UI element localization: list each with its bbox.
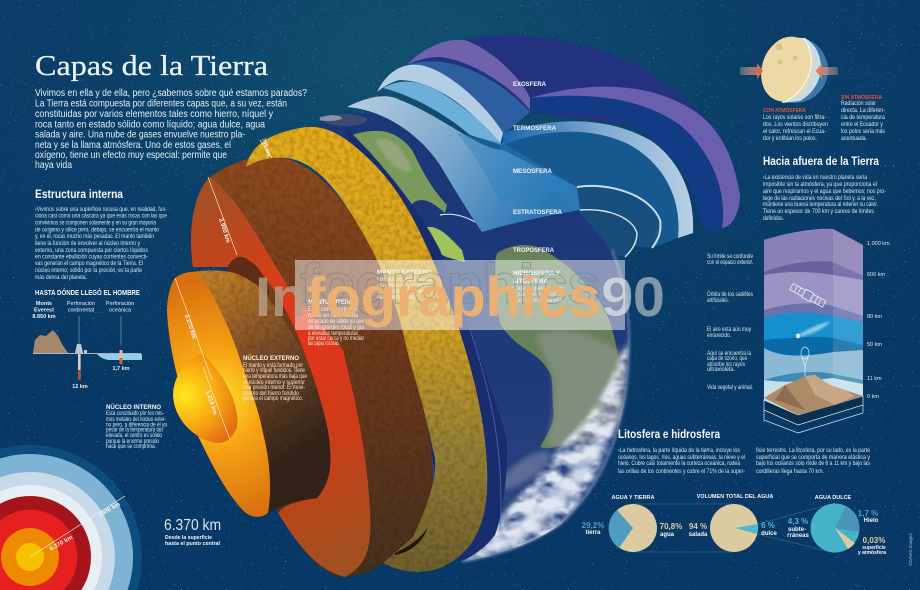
label: manto interno (308, 299, 365, 347)
dark cavity in yellow band (395, 525, 428, 555)
altitude labels: 80 km (867, 314, 882, 320)
labels: atmosphere column notes (707, 254, 754, 391)
mountain block (764, 375, 863, 433)
labels: atmosphere column notes: con el espacio exterior. (707, 260, 753, 266)
pie: agua y tierra (582, 495, 682, 552)
text: hacia afuera: tege de las radiaciones nocivas del Sol y, a la vez, (763, 196, 876, 202)
label: nucleo interno: hace que se comprima. (106, 444, 156, 450)
pie: agua y tierra: tierra (585, 530, 601, 536)
labels: atmosphere column notes: El aire está aún muy (707, 327, 751, 333)
heading: hacia afuera: Hacia afuera de la Tierra (763, 154, 879, 168)
intro text (35, 88, 307, 171)
altitude labels: 1.000 km (867, 241, 890, 247)
text: litosfera e hidrosfera: hielo. Cubre casi totalmente la corteza oceánica, rodea (618, 461, 741, 467)
pie: agua dulce: superficie (862, 545, 886, 551)
pie: agua dulce: subte- (788, 527, 806, 533)
arrow: left incoming (740, 63, 763, 79)
south america (494, 245, 625, 448)
text: hacia afuera: definidos. (763, 216, 784, 222)
cloud cover (462, 340, 628, 562)
chart: concentric earth section: 2900 km (98, 502, 122, 519)
chart: atmosphere column (764, 225, 890, 433)
termosfera shell (377, 65, 693, 248)
label: manto interno: MANTO INTERNO (308, 299, 358, 306)
distance lines and labels (175, 138, 272, 440)
labels: atmosphere column notes: Vida vegetal y animal. (707, 385, 753, 391)
label: nucleo interno: elevada, el centro es sólido (106, 433, 163, 439)
labels: atmosphere layer names: ESTRATOSFERA (513, 209, 562, 216)
text: estructura interna: tiene la función de envolver al núcleo interno y (35, 241, 140, 247)
depth labels: Everest (34, 308, 54, 314)
inner core sphere (173, 354, 237, 443)
intro text: salada y aire. Una nube de gases envuelve nuestro pla- (35, 130, 245, 140)
labels: atmosphere column notes: capa de ozono, que (707, 356, 747, 362)
text: litosfera e hidrosfera: las orillas de los continentes y cubre el 71% de la super- (618, 469, 745, 475)
label: manto externo: que se desplazan muy (377, 289, 427, 295)
text: hacia afuera: imposible sin la atmósfera, ya que proporciona el (763, 182, 877, 188)
pie: agua dulce: rráneas (787, 533, 810, 539)
icon: mountain (33, 330, 68, 353)
text: con atmosfera: dor y entibian los polos. (763, 136, 817, 142)
chart: concentric earth section (0, 445, 142, 590)
label: manto interno: rocas en fase sólida (308, 313, 359, 319)
mantle red face (191, 177, 370, 577)
atmosphere translucent sheet (347, 96, 580, 232)
icon: balloon (801, 347, 809, 382)
pie: agua dulce: 1,7 % (858, 509, 878, 518)
text: con atmosfera: dos. Los vientos distribuyen (763, 122, 828, 128)
label: manto externo: MANTO EXTERNO (377, 269, 432, 276)
distance lines and labels: 1.216 km (204, 390, 218, 416)
text: litosfera e hidrosfera (618, 448, 871, 475)
pie: volumen total del agua: salada (689, 532, 708, 538)
labels: atmosphere layer names: EXOSFERA (513, 81, 546, 88)
pie: agua y tierra: 70,8% (660, 522, 682, 531)
label: manto interno: de las grandes rocas y gra (308, 325, 365, 331)
text: sin atmosfera: acentuada. (841, 136, 867, 142)
text: hidrosfera y litosfera (513, 286, 564, 304)
connector lines (633, 503, 835, 553)
labels: atmosphere column notes: Su límite se confunde (707, 254, 754, 260)
central america (427, 214, 475, 262)
north america (314, 114, 447, 213)
labels: atmosphere layer names: TERMOSFERA (513, 125, 556, 132)
text: sin atmosfera: SIN ATMÓSFERA (841, 93, 882, 101)
pie: volumen total del agua: VOLUMEN TOTAL DEL AGUA (697, 494, 773, 500)
charts: water pies (582, 494, 886, 556)
text: litosfera e hidrosfera: ‹La hidrosfera, la parte líquida de la tierra, incluye los (618, 448, 740, 454)
depth labels: Perforación (106, 301, 134, 307)
label: manto interno: en estado de sólido ya que (308, 319, 365, 325)
label: manto externo: Formado por rocas sólidas (377, 277, 432, 283)
depth labels: Perforación (67, 301, 95, 307)
text: estructura interna (35, 207, 168, 281)
exosfera shell (405, 36, 740, 232)
label: manto interno: a elevadas temperaturas (308, 331, 358, 337)
text: con atmosfera: CON ATMÓSFERA (763, 106, 806, 114)
mantle cavity lip (228, 257, 270, 296)
intro text: roca tanto en estado sólido como líquido; agua dulce, agua (35, 120, 265, 130)
text: litosfera e hidrosfera: ficie terrestre. La litosfera, por su lado, es la parte (756, 448, 871, 454)
text: sin atmosfera: directa. La diferen- (841, 108, 885, 114)
label: nucleo externo: una temperatura más baja que (243, 374, 308, 380)
panel: hasta donde llego el hombre (32, 288, 142, 390)
pie: agua y tierra: agua (660, 532, 675, 538)
labels: atmosphere column notes: Aquí se encuentra la (707, 351, 752, 357)
text: estructura interna: ‹Vivimos sobre una superficie rocosa que, en realidad, fun- (35, 207, 167, 213)
credit: ©DAVID Images (907, 533, 913, 566)
pie: volumen total del agua (689, 494, 777, 552)
depth labels: 12 km (72, 384, 88, 390)
mesosfera shell (383, 82, 661, 248)
text: litosfera e hidrosfera: bajo los océanos sólo mide de 6 a 11 km y bajo las (756, 461, 870, 467)
text: hacia afuera: Tiene un espesor de 700 km y carece de límites (763, 209, 874, 215)
label: manto interno: por estar cerca y no mediar (308, 336, 364, 342)
pie: agua dulce: Hielo (864, 518, 879, 524)
text: estructura interna: y, en él, rocas mucho más pesadas. El manto también (35, 234, 154, 240)
label: manto interno: las capas rocosas. (308, 341, 340, 347)
labels: atmosphere layer names (513, 81, 562, 285)
labels: atmosphere column notes: artificiales. (707, 298, 729, 304)
text: estructura interna: más densa del planeta. (35, 275, 87, 281)
arrow: right incoming (816, 63, 838, 79)
label: nucleo externo: miento del hierro fundido (243, 391, 300, 397)
altitude labels: 0 km (867, 394, 879, 400)
text: hidrosfera y litosfera: Capa superficial de (513, 286, 564, 292)
icon: drill rigs (75, 316, 122, 380)
text: sin atmosfera: Radiación solar (841, 101, 876, 107)
distance lines and labels: 2.900 km (217, 218, 231, 244)
text: con atmosfera: Los rayos solares son filtra- (763, 115, 826, 121)
intro text: La Tierra está compuesta por diferentes capas que, a su vez, están (35, 98, 287, 110)
heading: litosfera e hidrosfera: Litosfera e hidrosfera (618, 427, 720, 441)
labels: atmosphere layer names: MESOSFERA (513, 168, 552, 175)
heading: estructura interna: Estructura interna (35, 189, 124, 201)
callout: 6370 km: 6.370 km (164, 517, 221, 534)
distance lines and labels: 700 km (260, 138, 272, 157)
globe (753, 30, 828, 108)
labels: atmosphere column notes: Órbita de los satélites (707, 291, 753, 298)
labels: atmosphere column notes: enrarecido. (707, 333, 731, 339)
label: nucleo externo: NÚCLEO EXTERNO (243, 353, 299, 362)
text: sin atmosfera: los polos sería más (841, 129, 885, 135)
callout: 6370 km: hasta el punto central (165, 541, 220, 547)
text: estructura interna: en constante ebullición cuyas corrientes convecti- (35, 254, 148, 260)
label: nucleo interno: mos metales del núcleo exter- (106, 417, 166, 423)
title: Capas de la Tierra (35, 50, 268, 82)
text: estructura interna: de oxígeno y sílice pero, debajo, se encuentra el manto (35, 228, 160, 234)
diagram: with and without atmosphere (740, 30, 838, 108)
text: hacia afuera: ‹La existencia de vida en nuestro planeta sería (763, 175, 868, 181)
depth labels: 8.850 km (32, 314, 56, 320)
altitude labels (867, 241, 890, 400)
label: nucleo externo: El manto y está formado por (243, 363, 303, 369)
text: sin atmosfera: entre el Ecuador y (841, 122, 883, 128)
altitude labels: 50 km (867, 342, 882, 348)
callout: 6370 km: Desde la superficie (165, 535, 212, 541)
mantle brown shell (191, 156, 433, 577)
label: manto externo (377, 269, 432, 301)
altitude labels: 600 km (867, 272, 885, 278)
outer core orange face (167, 272, 270, 517)
labels: atmosphere column notes: absorbe los rayos (707, 362, 745, 368)
labels: atmosphere layer names: LITOSFERA (513, 278, 548, 285)
lithosphere yellow band (246, 127, 487, 572)
text: litosfera e hidrosfera: cordilleras llega hasta 70 km. (756, 469, 824, 475)
text: hacia afuera: aire que respiramos y el agua que bebemos; nos pro- (763, 189, 886, 195)
intro text: Vivimos en ella y de ella, pero ¿sabemos sobre qué estamos parados? (35, 88, 307, 99)
distance lines and labels: 2.270 km (183, 314, 197, 340)
text: estructura interna: convivimos se componen solamente y en su gran mayoría (35, 220, 157, 226)
text: litosfera e hidrosfera: océanos, los lagos, ríos, aguas subterráneas, la nieve y el (618, 455, 745, 461)
cut crust strip (345, 127, 507, 565)
depth labels: Monte (36, 301, 52, 307)
watermark: Infographics90 (255, 265, 665, 328)
pie: agua y tierra: 29,2% (582, 521, 604, 530)
labels: atmosphere layer names: HIDROSFERA Y (513, 270, 561, 277)
label: nucleo externo: el núcleo interno y superior (243, 380, 305, 386)
subheading: HASTA DÓNDE LLEGÓ EL HOMBRE (35, 288, 140, 297)
chart: concentric earth section: 6.370 km (49, 535, 74, 553)
callout: 6370 km (164, 517, 221, 547)
label: nucleo externo: una presión menor. El movi- (243, 385, 305, 391)
text: sin atmosfera (841, 93, 886, 142)
intro text: constituidas por varios elementos tales como hierro, níquel y (35, 109, 273, 120)
text: hidrosfera y litosfera: que cubre el planeta. (513, 298, 563, 304)
pie: agua dulce: AGUA DULCE (815, 495, 852, 501)
text: estructura interna: externo, una zona compuesta por ciertos líquidos (35, 248, 148, 254)
label: nucleo interno: porque la enorme presión (106, 439, 159, 445)
intro text: oxígeno, tiene un efecto muy especial: permite que (35, 150, 227, 161)
label: nucleo interno: no pero, a diferencia de él ya (106, 422, 168, 428)
pie: volumen total del agua: 6 % (761, 521, 775, 530)
labels: atmosphere layer names: TROPOSFERA (513, 247, 554, 254)
text: estructura interna: ciona casi como una cáscara ya que esas rocas con las que (35, 214, 168, 220)
label: nucleo interno: pesar de la temperatura tan (106, 428, 163, 434)
depth labels (32, 301, 134, 390)
text: estructura interna: núcleo interno; sólido por la presión, es la parte (35, 268, 143, 274)
pie: agua dulce: y atmósfera (858, 550, 886, 556)
atmosphere layers (377, 36, 740, 257)
text: litosfera e hidrosfera: superficial que se comporta de manera elástica y (756, 455, 870, 461)
pie: agua dulce (787, 495, 886, 556)
text: hacia afuera (763, 175, 886, 222)
text: con atmosfera: el calor, refrescan el Ecua- (763, 129, 826, 135)
pie: volumen total del agua: dulce (761, 531, 777, 537)
watermark: fographics (300, 252, 600, 315)
pie: volumen total del agua: 94 % (689, 522, 707, 531)
earth interior layers (167, 127, 487, 577)
depth labels: 1,7 km (112, 366, 130, 372)
text: estructura interna: vas generan el campo magnético de la Tierra. El (35, 261, 143, 267)
intro text: neta y se la llama atmósfera. Uno de estos gases, el (35, 140, 231, 151)
label: nucleo externo: hierro y níquel fundidos. Tiene (243, 368, 306, 374)
ground and water (33, 354, 142, 360)
icon: satellite (789, 283, 826, 308)
label: nucleo interno: Está constituido por los mis- (106, 411, 164, 417)
pie: agua dulce: 0,03% (863, 536, 885, 545)
estratosfera shell (560, 210, 637, 257)
depth labels: continental (68, 308, 94, 314)
label: nucleo externo: genera el campo magnético. (243, 396, 303, 402)
label: manto interno: Está compuesto por (308, 307, 358, 313)
text: sin atmosfera: cia de temperatura (841, 115, 886, 121)
label: nucleo interno (106, 402, 168, 450)
pie: agua y tierra: AGUA Y TIERRA (612, 495, 655, 501)
label: manto externo: lentamente. (377, 295, 417, 301)
text: con atmosfera (763, 106, 828, 142)
text: hacia afuera: mantiene una buena temperatura al retener su calor. (763, 202, 878, 208)
depth labels: oceánica (109, 308, 132, 314)
intro text: haya vida (35, 160, 72, 171)
label: nucleo interno: NÚCLEO INTERNO (106, 402, 161, 411)
label: nucleo externo (243, 353, 308, 402)
outer core dark shell (193, 270, 330, 513)
earth globe (300, 113, 630, 565)
altitude labels: 11 km (867, 376, 882, 382)
label: manto externo: muy densas y calientes (377, 283, 432, 289)
text: hidrosfera y litosfera: agua y de roca sólida (513, 292, 564, 298)
icon: comet (796, 321, 831, 338)
labels: atmosphere column notes: ultravioleta. (707, 367, 735, 373)
pie: agua dulce: 4,3 % (788, 517, 808, 526)
